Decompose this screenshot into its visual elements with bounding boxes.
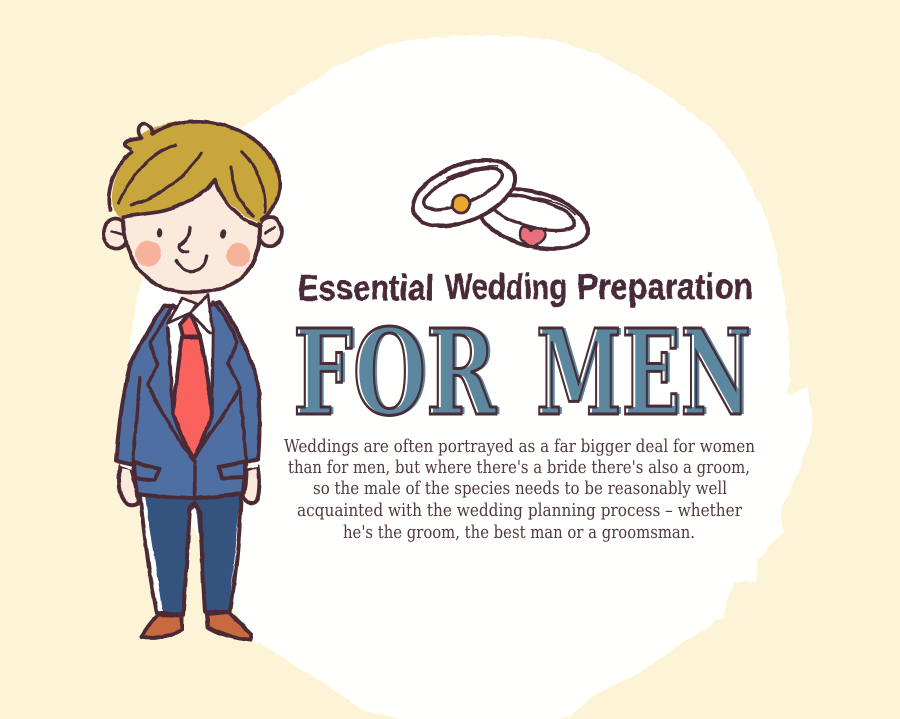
icon: wedding rings [403,147,594,260]
shirt cuffs [119,459,258,470]
intro paragraph [284,436,755,543]
jacket [116,302,260,498]
intro paragraph: he's the groom, the best man or a groomsman. [343,522,695,543]
cheeks [135,241,251,267]
intro paragraph: than for men, but where there's a bride there's also a groom, [288,457,750,478]
shirt [168,305,213,460]
intro paragraph: Weddings are often portrayed as a far bigger deal for women [284,436,755,457]
left hand [119,466,139,505]
subtitle [298,266,753,308]
collar [168,295,213,333]
head [103,120,282,293]
subtitle: Essential [298,267,434,308]
intro paragraph: so the male of the species needs to be reasonably well [313,478,727,499]
eyes [156,229,226,239]
title: FOR MEN: MEN [536,303,751,442]
shoes [142,612,251,640]
mouth [176,256,207,271]
character: groom [103,120,282,640]
ring with gem [403,147,525,239]
subtitle: Preparation [577,266,753,307]
intro paragraph: acquainted with the wedding planning process – whether [297,500,742,521]
necktie [173,313,212,459]
title: FOR MEN: MEN [539,303,754,442]
title: FOR MEN [293,303,754,442]
title: FOR MEN: FOR [293,303,497,442]
trousers [140,496,241,615]
ears [103,217,282,249]
white brush blob [130,35,813,719]
title: FOR MEN: FOR [296,303,500,442]
hair [109,120,280,227]
lapels and seams [133,302,246,497]
face [123,170,260,293]
jacket pockets [134,462,245,480]
right hand [243,466,259,503]
neck [182,292,208,313]
ring with heart [472,178,594,260]
subtitle: Wedding [445,266,567,307]
nose [179,227,190,252]
